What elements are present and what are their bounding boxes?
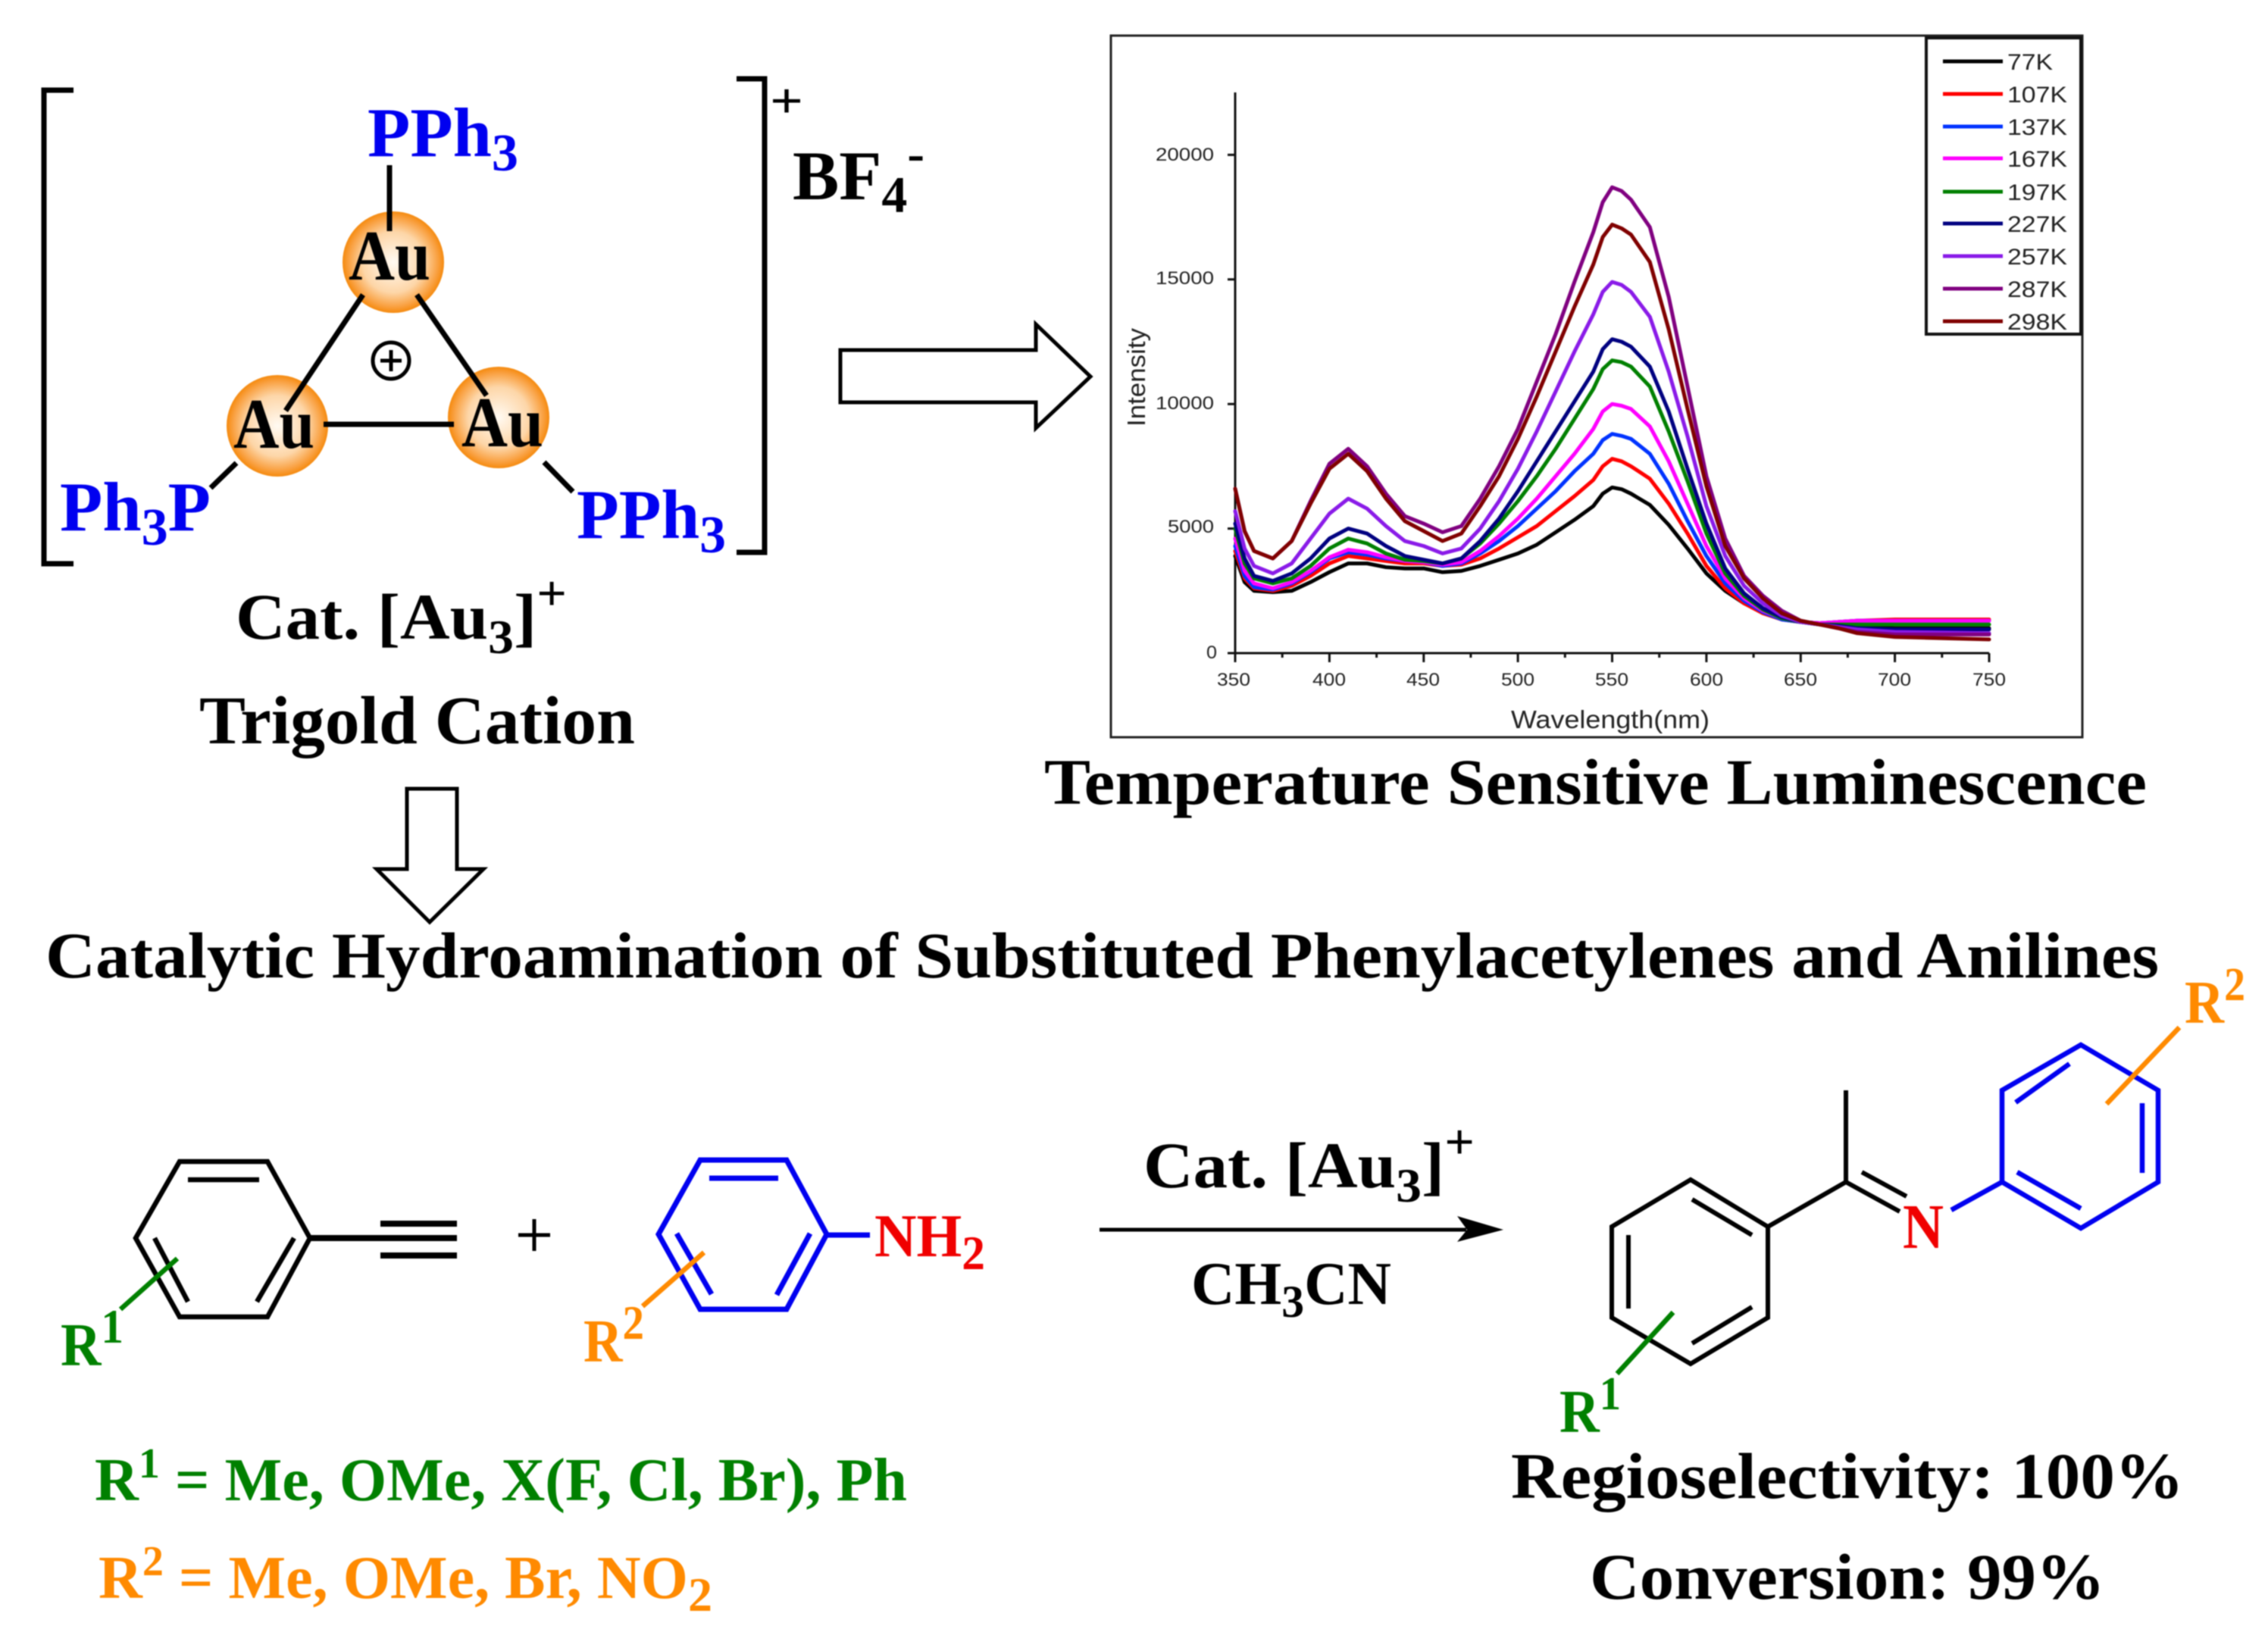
panel: trigold cation structure [44,73,924,564]
R1 bond [120,1259,177,1309]
plus sign [518,1219,550,1251]
ligand: right PPh3: PPh [577,476,701,553]
ligand: right PPh3: 3 [699,506,726,564]
R1 label: 1 [101,1299,124,1353]
right bracket [737,79,765,552]
chart legend: 287K [2007,277,2067,302]
counter-ion BF4-: 4 [881,166,907,224]
label: Cat. [Au3]+: Cat. [Au [236,580,474,653]
Au-Au and Au-P bonds [211,165,573,492]
nitrogen label: N [1903,1192,1944,1262]
ligand: top PPh3: 3 [492,124,518,183]
substituent list: R2: = Me, OMe, Br, NO [164,1545,688,1612]
result: conversion: Conversion: 99% [1590,1540,2105,1613]
NH2 label: NH [874,1203,965,1270]
chart legend: 227K [2007,212,2067,237]
Au label: right: Au [461,383,543,462]
x axis tick labels: 450 [1406,670,1440,690]
x axis tick labels: 750 [1972,670,2006,690]
reagent: Cat. [Au3]+: + [1444,1115,1475,1170]
left bracket [44,90,74,564]
solvent: CH3CN: CH [1191,1251,1282,1318]
heading: luminescence: Temperature Sensitive Luminescence [1044,746,2147,818]
R1 label: 1 [1600,1368,1621,1420]
substituent list: R2: 2 [142,1538,164,1585]
x axis tick labels: 400 [1312,670,1346,690]
reaction arrow [1100,1216,1503,1242]
benzene ring [136,1162,310,1317]
chart frame [1111,36,2082,737]
R2 label: R [2185,970,2229,1037]
alkyne [310,1224,457,1255]
substituent list: R2: 2 [688,1568,712,1621]
chart legend: 257K [2007,245,2067,270]
y axis title: Intensity [1122,327,1150,427]
solvent: CH3CN: 3 [1281,1277,1304,1327]
chart legend [1926,38,2081,335]
charge: plus: + [770,73,803,129]
ligand: top PPh3: PPh [368,94,492,171]
x axis tick labels: 650 [1784,670,1817,690]
chart legend: 298K [2007,310,2067,335]
R1 label: R [1559,1379,1603,1446]
x axis tick labels: 500 [1501,670,1534,690]
x axis title: Wavelength(nm) [1511,705,1710,733]
R1 label: R [61,1312,105,1379]
x axis tick labels: 350 [1217,670,1250,690]
y axis tick labels: 20000 [1156,145,1214,165]
phenyl ring and carbon skeleton [1612,1090,1907,1364]
chart axes and ticks [1228,92,1989,662]
R2 bond [643,1252,704,1306]
arrow: to luminescence chart [840,324,1090,428]
reagent: Cat. [Au3]+: 3 [1396,1159,1422,1212]
y axis tick labels: 15000 [1156,268,1214,289]
result: regioselectivity: Regioselectivity: 100% [1511,1440,2184,1512]
x axis tick labels: 550 [1595,670,1628,690]
arrow: down to catalysis [377,789,483,922]
R2 label: 2 [622,1296,644,1349]
y axis tick labels: 0 [1206,643,1217,663]
chart legend: 197K [2007,180,2067,205]
molecule: substituted aniline [583,1160,985,1375]
gold atom: right [448,367,549,468]
gold atom: top [343,211,444,313]
spectra curves [1235,187,1989,639]
solvent: CH3CN: CN [1304,1251,1391,1318]
y axis tick labels: 10000 [1156,393,1214,414]
aniline ring [659,1160,870,1309]
label: Cat. [Au3]+: 3 [488,610,514,664]
gold atom: left [227,375,328,477]
Au label: left: Au [233,385,314,464]
chart legend: 137K [2007,115,2067,140]
label: Trigold Cation: Trigold Cation [199,683,635,758]
R2 label: R [583,1309,627,1375]
heading: catalytic hydroamination: Catalytic Hydroamination of Substituted Phenylacetylenes and Anilines [45,919,2159,992]
chart legend: 77K [2007,50,2053,75]
label: Cat. [Au3]+: ] [514,580,536,653]
substituent list: R1: 1 [139,1440,160,1487]
ligand: left Ph3P: Ph [60,468,141,546]
chart legend: 167K [2007,147,2067,172]
substituent list: R1: R [95,1447,139,1514]
counter-ion BF4-: - [907,124,924,182]
counter-ion BF4-: BF [793,137,882,214]
R2 label: 2 [2224,959,2245,1011]
label: Cat. [Au3]+: + [536,566,567,621]
y axis tick labels: 5000 [1168,517,1214,537]
ligand: left Ph3P: P [168,468,211,546]
reagent: Cat. [Au3]+: Cat. [Au [1143,1129,1382,1202]
panel: luminescence spectra chart [1111,36,2082,737]
N-aryl ring [1951,1045,2158,1228]
R1 bond [1617,1312,1673,1374]
NH2 label: 2 [962,1226,985,1280]
x axis tick labels [1217,670,2006,690]
x axis tick labels: 600 [1690,670,1723,690]
y axis tick labels [1156,145,1217,663]
x axis tick labels: 700 [1878,670,1911,690]
chart legend: 107K [2007,83,2067,108]
substituent list: R2: R [99,1545,142,1612]
molecule: substituted phenylacetylene [61,1162,457,1379]
molecule: imine product [1559,959,2245,1446]
reagent: Cat. [Au3]+: ] [1422,1129,1444,1202]
substituent list: R1: = Me, OMe, X(F, Cl, Br), Ph [160,1447,907,1514]
central positive charge [373,342,409,379]
ligand: left Ph3P: 3 [142,499,168,557]
Au label: top: Au [349,217,430,295]
R2 bond [2107,1027,2179,1104]
